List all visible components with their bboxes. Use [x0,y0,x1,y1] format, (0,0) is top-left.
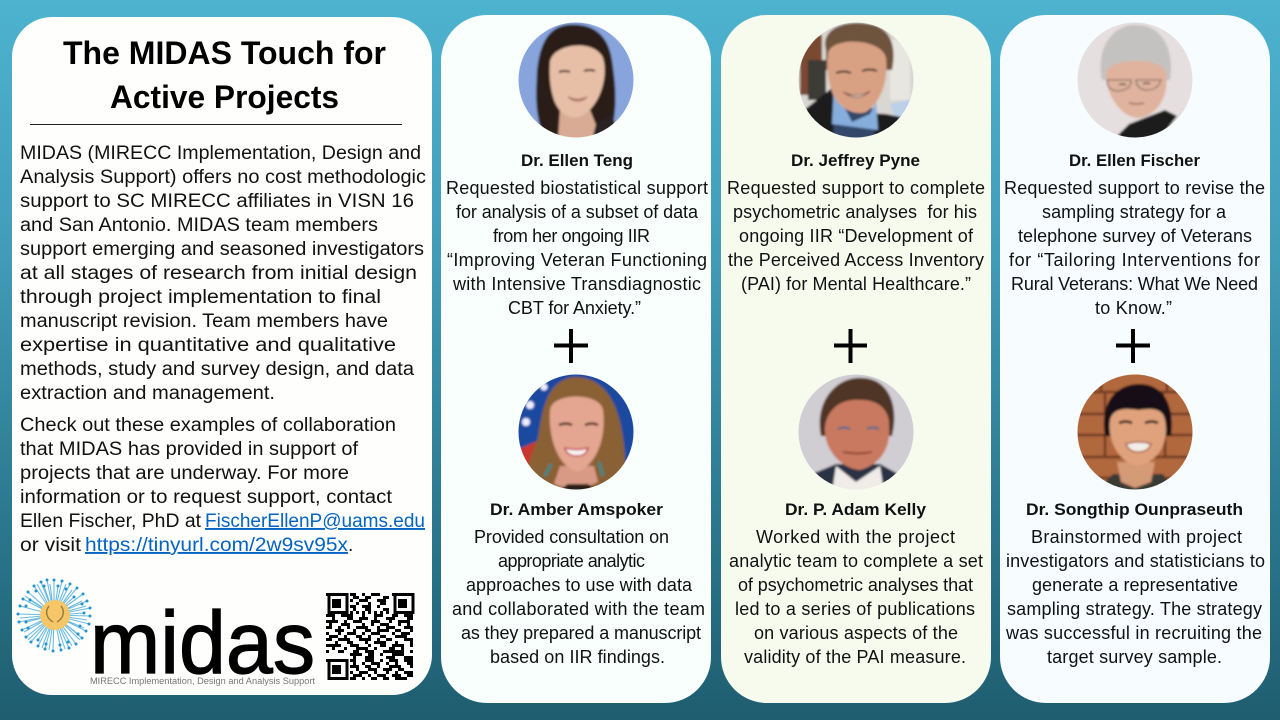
text block: Fischer request: Requested support to revise the [1004,178,1265,198]
text block: Fischer request: for “Tailoring Interventions for [1009,250,1260,270]
text block: Kelly contribution: analytic team to complete a set [729,551,983,571]
text block: Fischer request: telephone survey of Veterans [1018,226,1252,246]
text block: contact information: Check out these examples of collaboration [20,415,396,436]
name: Dr. Amber Amspoker: Dr. Amber Amspoker [490,501,664,519]
text block: Kelly contribution: on various aspects of the [754,623,958,643]
text block: Amspoker contribution: appropriate analytic [498,551,645,571]
name: Dr. Songthip Ounpraseuth: Dr. Songthip Ounpraseuth [1026,501,1243,519]
text block: Amspoker contribution [452,527,705,667]
portrait: Dr. Songthip Ounpraseuth [1075,372,1195,492]
text block: Fischer request: Rural Veterans: What We Need [1011,274,1258,294]
text block: MIDAS description: through project implementation to final [20,287,381,308]
portrait: Dr. Ellen Teng [516,20,636,140]
text block: MIDAS description: extraction and management. [20,383,275,404]
text block: MIDAS description: MIDAS (MIRECC Implementation, Design and [20,143,421,164]
name: Dr. Ellen Teng: Dr. Ellen Teng [521,152,633,170]
text block: Ounpraseuth contribution: sampling strategy. The strategy [1007,599,1262,619]
text block: Teng request: CBT for Anxiety.” [508,298,641,318]
name: Dr. Jeffrey Pyne: Dr. Jeffrey Pyne [791,152,920,170]
text block: MIDAS description: at all stages of research from initial design [20,263,417,284]
text block: MIDAS description: manuscript revision. Team members have [20,311,388,332]
text block: Ounpraseuth contribution: target survey sample. [1047,647,1222,667]
text block: MIDAS description: Analysis Support) offers no cost methodologic [20,167,426,188]
text block: Amspoker contribution: approaches to use with data [466,575,693,595]
text block: Teng request: for analysis of a subset of data [456,202,699,222]
panel: Teng and Amspoker [441,15,711,703]
text block: Amspoker contribution: Provided consultation on [474,527,669,547]
text block: Amspoker contribution: as they prepared a manuscript [461,623,701,643]
text block: MIDAS description [20,143,426,404]
name: Dr. P. Adam Kelly: Dr. P. Adam Kelly [785,501,927,519]
text block: contact information: projects that are underway. For more [20,463,349,484]
icon: plus [834,329,867,363]
text block: Kelly contribution: validity of the PAI measure. [744,647,966,667]
wordmark: midas [90,593,315,692]
text block: contact information: or visit [20,535,82,556]
portrait: Dr. Jeffrey Pyne [796,20,916,140]
title: The MIDAS Touch for [63,35,386,71]
text block: contact information: that MIDAS has provided in support of [20,439,359,460]
text block: Pyne request: (PAI) for Mental Healthcare.” [741,274,971,294]
panel: introduction [12,17,432,695]
name: Dr. Ellen Fischer: Dr. Ellen Fischer [1069,152,1201,170]
text block: Teng request: “Improving Veteran Functioning [447,250,707,270]
text block: contact information: FischerEllenP@uams.edu [205,511,425,532]
text block: Ounpraseuth contribution: was successful in recruiting the [1005,623,1262,643]
text block: MIDAS description: support to SC MIRECC affiliates in VISN 16 [20,191,414,212]
text block: Ounpraseuth contribution: Brainstormed with project [1031,527,1242,547]
text block: Kelly contribution: Worked with the project [756,527,955,547]
text block: Kelly contribution [729,527,983,667]
text block: Kelly contribution: led to a series of publications [735,599,975,619]
text block: contact information: information or to request support, contact [20,487,393,508]
text block: Fischer request: sampling strategy for a [1042,202,1227,222]
text block: Ounpraseuth contribution: generate a representative [1032,575,1238,595]
portrait: Dr. Amber Amspoker [516,372,636,492]
portrait: Dr. Ellen Fischer [1075,20,1195,140]
tagline: MIRECC Implementation, Design and Analysis Support [90,676,316,686]
panel: Fischer and Ounpraseuth [1000,15,1270,703]
portrait: Dr. P. Adam Kelly [796,372,916,492]
text block: Teng request: Requested biostatistical support [446,178,708,198]
text block: Teng request: with Intensive Transdiagnostic [452,274,701,294]
text block: Pyne request: psychometric analyses for his [733,202,977,222]
text block: contact information [20,415,425,556]
text block: contact information: . [348,535,353,556]
text block: Kelly contribution: of psychometric analyses that [738,575,973,595]
text block: Amspoker contribution: based on IIR findings. [490,647,665,667]
title: Active Projects [110,79,339,115]
text block: Pyne request: Requested support to complete [727,178,985,198]
panel: Pyne and Kelly [721,15,991,703]
text block: Amspoker contribution: and collaborated with the team [452,599,705,619]
text block: Teng request: from her ongoing IIR [493,226,650,246]
text block: MIDAS description: support emerging and seasoned investigators [20,239,424,260]
title [63,35,386,115]
text block: Fischer request: to Know.” [1095,298,1172,318]
icon: plus [554,329,588,363]
text block: Pyne request [727,178,985,294]
text block: contact information: https://tinyurl.com/2w9sv95x [85,535,349,556]
text block: MIDAS description: expertise in quantitative and qualitative [20,335,396,356]
text block: Fischer request [1004,178,1265,318]
text block: MIDAS description: methods, study and survey design, and data [20,359,414,380]
QR code [325,593,413,681]
icon: plus [1116,329,1150,363]
text block: Ounpraseuth contribution: investigators and statisticians to [1006,551,1265,571]
logo: midas [18,580,413,692]
text block: Ounpraseuth contribution [1005,527,1265,667]
text block: Pyne request: ongoing IIR “Development of [739,226,974,246]
text block: Pyne request: the Perceived Access Inventory [728,250,984,270]
icon: sunburst emblem [18,580,90,651]
text block: MIDAS description: and San Antonio. MIDAS team members [20,215,378,236]
text block: Teng request [446,178,708,318]
text block: contact information: Ellen Fischer, PhD at [20,511,202,532]
